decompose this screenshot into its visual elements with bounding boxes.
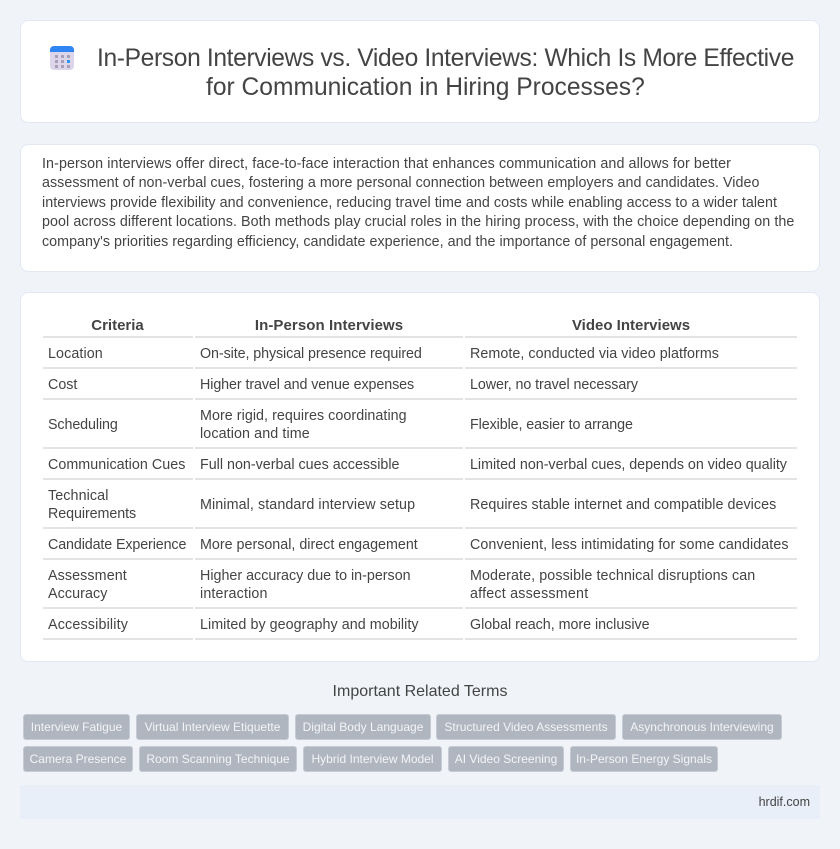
footer bar — [20, 785, 820, 819]
summary text: interviews provide flexibility and convenience, reducing travel time and costs while enabling access to a wider talent — [42, 195, 777, 211]
related terms tags: Digital Body Language — [303, 720, 423, 734]
row: Assessment Accuracy — [48, 568, 755, 602]
summary text: In-person interviews offer direct, face-to-face interaction that enhances communication and allows for better — [42, 156, 731, 172]
header panel — [20, 20, 820, 123]
row: Technical Requirements: Requirements — [48, 506, 136, 522]
row: Candidate Experience: Convenient, less intimidating for some candidates — [470, 537, 789, 553]
related terms tags: Interview Fatigue — [31, 720, 122, 734]
icon: calendar — [50, 46, 74, 70]
row: Technical Requirements: Minimal, standard interview setup — [200, 497, 415, 513]
row: Scheduling — [48, 408, 633, 442]
table header: Video Interviews: Video Interviews — [572, 317, 690, 334]
heading: Important Related Terms: Important Related Terms — [333, 683, 507, 700]
related terms tags — [23, 714, 782, 772]
related terms tags: Virtual Interview Etiquette — [145, 720, 280, 734]
row: Assessment Accuracy: Assessment — [48, 568, 127, 584]
row: Technical Requirements: Technical — [48, 488, 109, 504]
row: Location: Location — [48, 346, 103, 362]
panel: summary — [20, 144, 820, 272]
row: Communication Cues: Communication Cues — [48, 457, 185, 473]
row: Communication Cues — [48, 457, 787, 473]
row: Scheduling: location and time — [200, 426, 310, 442]
row: Technical Requirements — [48, 488, 776, 522]
summary text: company's priorities regarding efficiency, candidate experience, and the importance of personal engagement. — [42, 234, 733, 250]
related terms tags: Camera Presence — [30, 752, 126, 766]
title: for Communication in Hiring Processes? — [206, 74, 645, 101]
row: Candidate Experience: Candidate Experience — [48, 537, 186, 553]
row: Technical Requirements: Requires stable internet and compatible devices — [470, 497, 776, 513]
row: Communication Cues: Limited non-verbal cues, depends on video quality — [470, 457, 787, 473]
summary text: assessment of non-verbal cues, fostering a more personal connection between employers and candidates. Video — [42, 175, 759, 191]
row: Location: Remote, conducted via video platforms — [470, 346, 719, 362]
row: Assessment Accuracy: interaction — [200, 586, 268, 602]
title — [97, 45, 794, 101]
row: Accessibility: Limited by geography and mobility — [200, 617, 419, 633]
row: Accessibility: Accessibility — [48, 617, 128, 633]
related terms tags: Hybrid Interview Model — [311, 752, 434, 766]
related terms tags: AI Video Screening — [455, 752, 557, 766]
row: Scheduling: More rigid, requires coordinating — [200, 408, 407, 424]
row: Scheduling: Scheduling — [48, 417, 118, 433]
related terms tags: In-Person Energy Signals — [576, 752, 712, 766]
row: Cost: Lower, no travel necessary — [470, 377, 638, 393]
row: Candidate Experience — [48, 537, 789, 553]
title: In-Person Interviews vs. Video Interviews: Which Is More Effective — [97, 45, 794, 72]
row: Location — [48, 346, 719, 362]
row: Candidate Experience: More personal, direct engagement — [200, 537, 418, 553]
table header: Criteria: Criteria — [91, 317, 144, 334]
row: Communication Cues: Full non-verbal cues accessible — [200, 457, 399, 473]
related terms tags: Asynchronous Interviewing — [630, 720, 774, 734]
row: Assessment Accuracy: affect assessment — [470, 586, 588, 602]
footer bar: hrdif.com — [759, 795, 810, 809]
panel: comparison table — [20, 292, 820, 662]
row: Assessment Accuracy: Higher accuracy due to in-person — [200, 568, 411, 584]
row: Location: On-site, physical presence required — [200, 346, 422, 362]
table header: In-Person Interviews: In-Person Interviews — [255, 317, 403, 334]
related terms tags: Room Scanning Technique — [146, 752, 290, 766]
row: Cost: Higher travel and venue expenses — [200, 377, 414, 393]
summary text: pool across different locations. Both methods play crucial roles in the hiring process, with the choice depending on the — [42, 214, 794, 230]
row: Accessibility — [48, 617, 650, 633]
summary text — [42, 156, 794, 250]
row: Scheduling: Flexible, easier to arrange — [470, 417, 633, 433]
row: Assessment Accuracy: Accuracy — [48, 586, 107, 602]
row: Accessibility: Global reach, more inclusive — [470, 617, 650, 633]
row: Cost: Cost — [48, 377, 77, 393]
row: Assessment Accuracy: Moderate, possible technical disruptions can — [470, 568, 755, 584]
related terms tags: Structured Video Assessments — [444, 720, 608, 734]
row: Cost — [48, 377, 638, 393]
